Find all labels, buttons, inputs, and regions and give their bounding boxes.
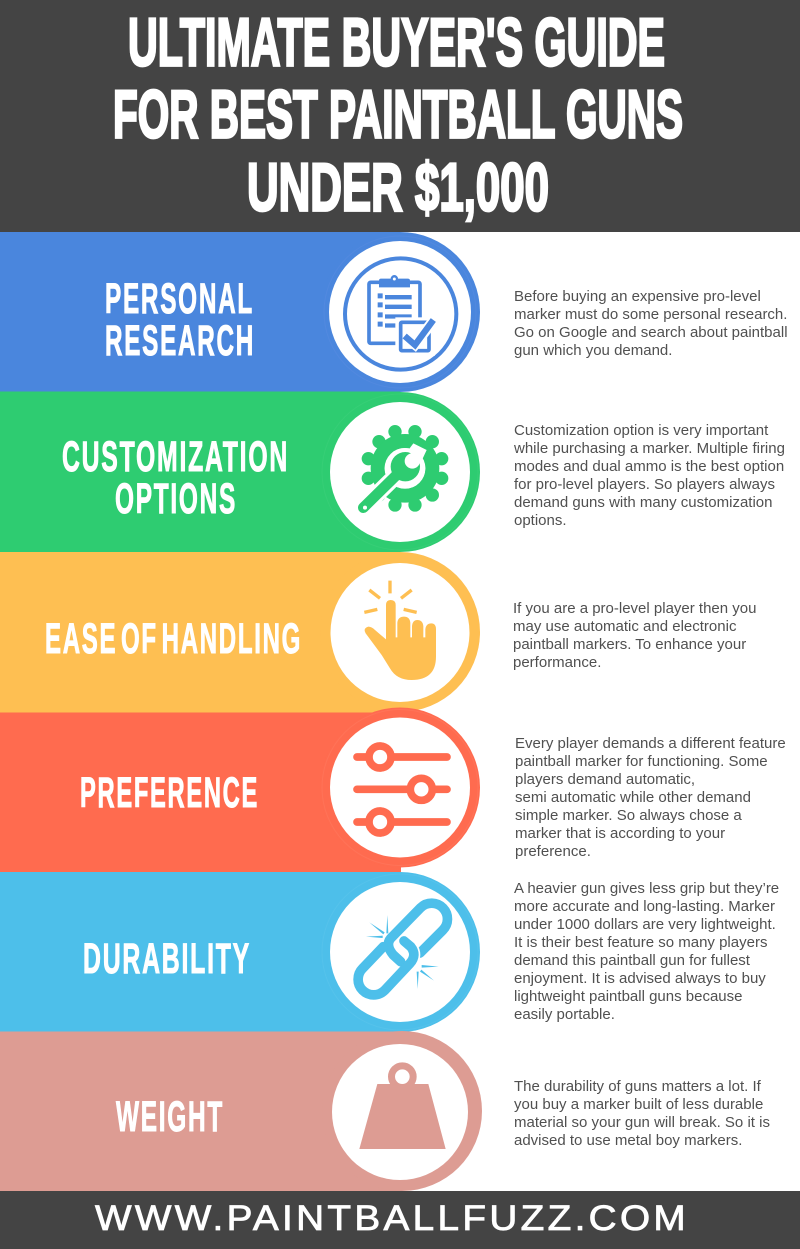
text: preference: marker that is according to your — [515, 825, 725, 842]
text: preference: semi automatic while other demand — [515, 789, 751, 806]
text: durability: enjoyment. It is advised always to buy — [514, 970, 766, 987]
text: personal research: marker must do some personal research. — [514, 306, 787, 323]
heading: durability: DURABILITY — [83, 936, 251, 983]
text: customization options: for pro-level players. So players always — [514, 476, 775, 493]
heading: personal research: RESEARCH — [105, 318, 255, 365]
text: customization options: demand guns with many customization — [514, 494, 772, 511]
heading: ease of handling: EASE OF HANDLING — [45, 616, 302, 663]
panel: personal research — [0, 232, 792, 392]
heading: weight: WEIGHT — [116, 1094, 224, 1141]
text: personal research: gun which you demand. — [514, 342, 672, 359]
text: weight: advised to use metal boy markers. — [514, 1132, 742, 1149]
title — [113, 4, 683, 226]
text: weight: you buy a marker built of less durable — [514, 1096, 763, 1113]
icon: gear and wrench — [362, 425, 448, 512]
heading: personal research — [105, 276, 255, 365]
footer panel — [0, 1191, 800, 1249]
text: durability: It is their best feature so many players — [514, 934, 767, 951]
text: preference: preference. — [515, 843, 591, 860]
panel: preference — [0, 708, 790, 872]
text: ease of handling: may use automatic and electronic — [513, 618, 737, 635]
header panel — [0, 0, 800, 232]
text: durability: easily portable. — [514, 1006, 615, 1023]
text: preference: paintball marker for functioning. Some — [515, 753, 768, 770]
text: customization options: while purchasing a marker. Multiple firing — [513, 440, 785, 457]
panel: durability — [0, 872, 783, 1032]
text: durability: demand this paintball gun for fullest — [514, 952, 751, 969]
icon: pointing hand — [364, 581, 436, 680]
icon: weight — [359, 1066, 446, 1149]
heading: customization options: CUSTOMIZATION — [62, 434, 289, 481]
title: UNDER $1,000 — [247, 150, 549, 226]
text: personal research: Go on Google and search about paintball — [514, 324, 788, 341]
heading: preference: PREFERENCE — [80, 770, 259, 817]
icon: chain link — [358, 903, 447, 995]
text: durability: under 1000 dollars are very lightweight. — [514, 916, 776, 933]
text: personal research: Before buying an expensive pro-level — [514, 288, 761, 305]
heading: customization options — [62, 434, 289, 523]
icon: sliders — [357, 746, 447, 833]
footer url: WWW.PAINTBALLFUZZ.COM — [95, 1199, 689, 1238]
text: durability: more accurate and long-lasting. Marker — [514, 898, 775, 915]
text: preference: simple marker. So always chose a — [515, 807, 742, 824]
text: durability: A heavier gun gives less grip but they’re — [514, 880, 779, 897]
heading: customization options: OPTIONS — [115, 476, 237, 523]
text: customization options: modes and dual ammo is the best option — [514, 458, 784, 475]
text: durability: lightweight paintball guns because — [514, 988, 742, 1005]
icon: clipboard with checkmark — [345, 258, 456, 370]
text: ease of handling: If you are a pro-level player then you — [513, 600, 756, 617]
text: ease of handling: performance. — [513, 654, 601, 671]
panel: weight — [0, 1031, 774, 1192]
text: ease of handling: paintball markers. To enhance your — [513, 636, 746, 653]
text: weight: material so your gun will break. So it is — [514, 1114, 770, 1131]
text: preference: players demand automatic, — [515, 771, 695, 788]
panel: customization options — [0, 392, 789, 552]
heading: personal research: PERSONAL — [105, 276, 254, 323]
text: customization options: options. — [514, 512, 567, 529]
panel: ease of handling — [0, 552, 761, 712]
text: preference: Every player demands a different feature — [515, 735, 786, 752]
text: customization options: Customization option is very important — [514, 422, 769, 439]
text: weight: The durability of guns matters a lot. If — [514, 1078, 762, 1095]
